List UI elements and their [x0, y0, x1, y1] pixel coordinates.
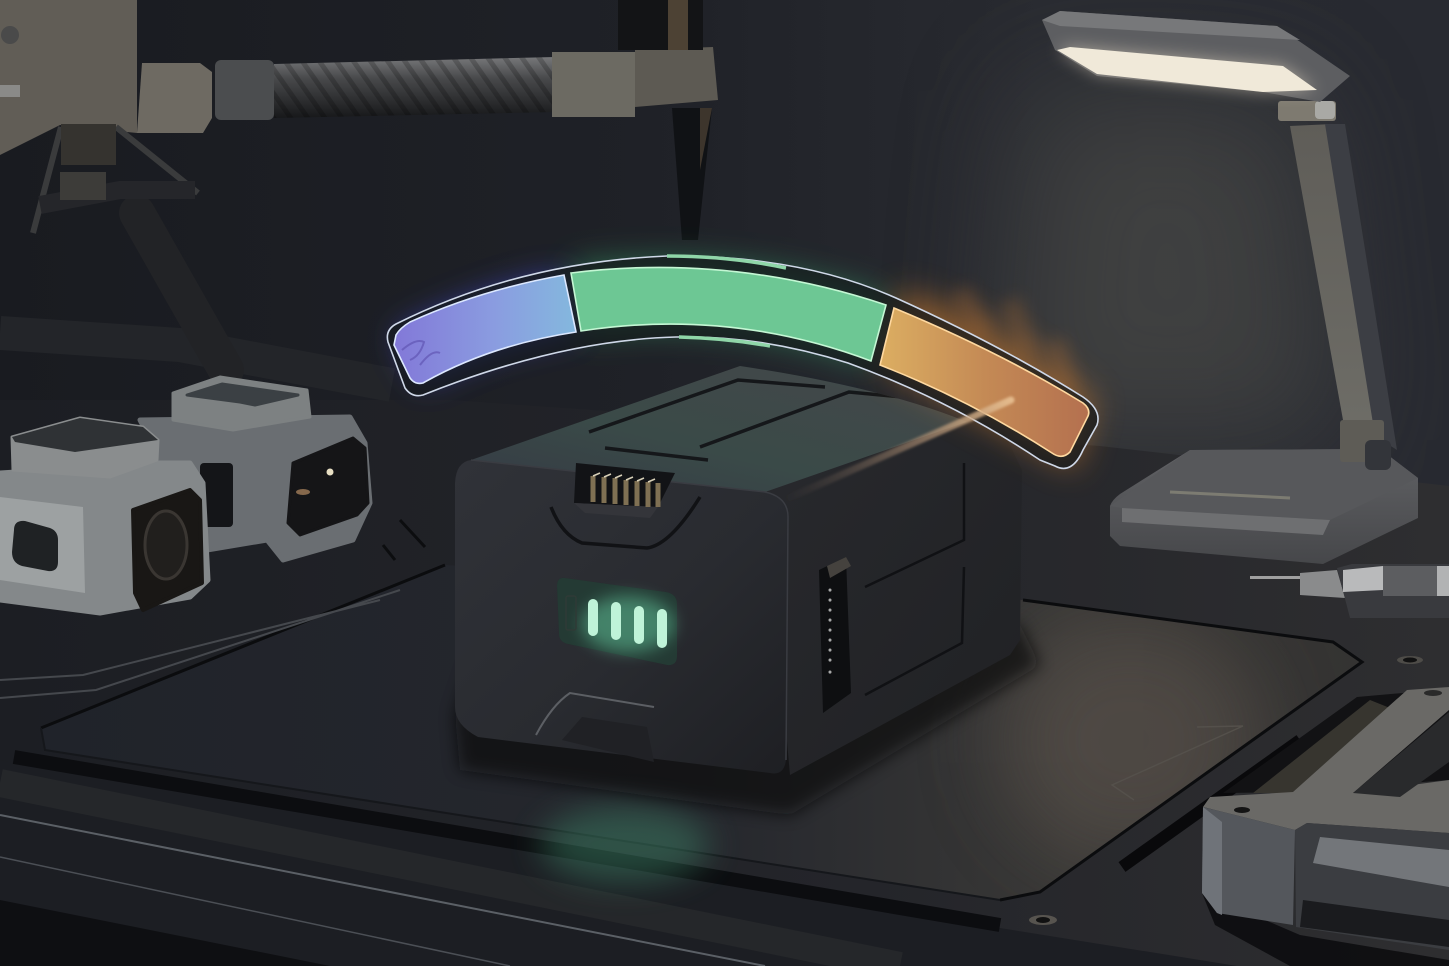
battery — [455, 366, 1040, 815]
battery top face — [471, 366, 985, 492]
front side button — [12, 521, 58, 571]
lower notch — [536, 693, 654, 762]
side connector — [819, 557, 851, 713]
contact port — [551, 463, 700, 548]
arc outer outline — [387, 256, 1098, 468]
bracket corner block — [1202, 807, 1295, 925]
pole lower stem — [672, 108, 712, 240]
front bench bands — [0, 760, 1449, 966]
lamp light on wall — [1000, 90, 1340, 440]
drone body top left — [0, 0, 392, 385]
bracket screws — [1234, 807, 1250, 813]
drone landing gear — [0, 333, 392, 385]
mat panel — [41, 565, 1362, 900]
side panel outlines — [865, 463, 964, 695]
glowing light panel — [1057, 47, 1317, 92]
arc blue cold section — [394, 275, 576, 383]
arc green optimal section — [571, 267, 886, 361]
bracket shadow — [1202, 893, 1449, 966]
rear lens window — [288, 438, 368, 535]
lamp arm — [1290, 124, 1383, 440]
lamp hinge — [1278, 101, 1336, 121]
temperature arc gauge — [387, 256, 1098, 500]
battery floor glow — [540, 807, 710, 883]
front camera — [0, 418, 208, 613]
heat ray — [784, 400, 1011, 500]
front lens window — [133, 490, 202, 610]
screwdriver tool — [1250, 564, 1449, 618]
arc glow blue — [396, 275, 576, 383]
desk lamp — [1042, 11, 1418, 564]
bracket front — [1295, 823, 1449, 950]
battery front face — [455, 460, 788, 773]
arc outline tabs — [667, 256, 786, 346]
indicator panel — [557, 578, 677, 665]
lamp base — [1110, 449, 1418, 564]
drone carbon arm — [137, 0, 718, 240]
workbench surface — [0, 400, 1449, 966]
lamp head — [1042, 11, 1350, 102]
upper left mat outline — [0, 590, 400, 698]
bracket opening — [1223, 687, 1449, 793]
right bench slot — [1122, 740, 1300, 867]
mat engraved detail — [1112, 726, 1243, 800]
arm foot hinge — [1340, 420, 1384, 462]
LED bars — [588, 599, 598, 636]
rear camera — [140, 377, 370, 560]
metal bracket bottom right — [1202, 687, 1449, 966]
vertical pole — [618, 0, 703, 50]
battery side face — [765, 420, 1022, 775]
camera modules left — [0, 377, 370, 613]
gold pins — [593, 476, 658, 507]
bench screws — [1029, 915, 1057, 925]
arc glow orange flames — [880, 290, 1095, 470]
battery shadow — [455, 625, 1040, 815]
arc glow green — [571, 259, 886, 365]
bracket top face — [1203, 687, 1449, 833]
arc orange hot section — [880, 308, 1089, 456]
